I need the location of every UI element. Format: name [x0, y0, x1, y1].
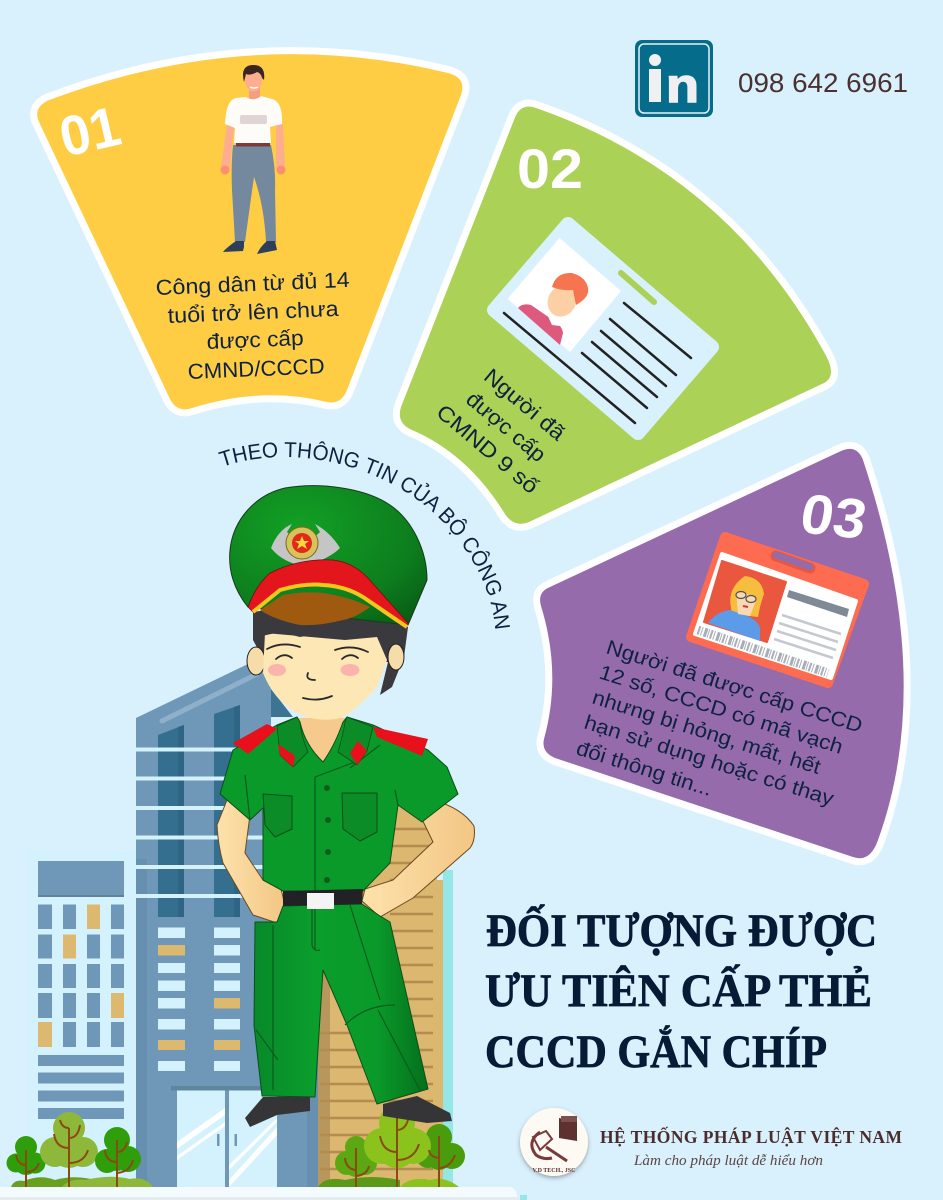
- ground strip: [0, 1187, 527, 1200]
- soldier: cap trim: [253, 585, 407, 627]
- soldier: hair back: [253, 600, 408, 695]
- text: 12-digit ID holders: đổi thông tin...: [574, 737, 715, 801]
- text: citizens from 14: được cấp: [206, 326, 304, 354]
- text: 12-digit ID holders: 12 số, CCCD có mã vạch: [597, 661, 846, 759]
- number 02: 02: [517, 137, 583, 200]
- soldier: trousers: [254, 904, 428, 1104]
- text: 9-digit ID holders: Người đã: [479, 364, 570, 445]
- panel 03: 12-digit ID holders: [540, 449, 904, 858]
- text: 12-digit ID holders: hạn sử dụng hoặc có thay: [582, 711, 837, 811]
- trees: left group: [6, 1112, 153, 1187]
- buildings: [28, 662, 453, 1187]
- soldier: ears: [247, 644, 404, 675]
- panel 02: 9-digit ID holders: [400, 106, 831, 524]
- phone number: 098 642 6961: [738, 68, 908, 98]
- soldier: cap brim: [260, 592, 370, 625]
- curved text: according to the Ministry of Public Security: THEO THÔNG TIN CỦA BỘ CÔNG AN: [218, 441, 510, 629]
- soldier: cap crown: [230, 486, 427, 625]
- icon: chip ID card: [691, 537, 864, 683]
- title: [485, 904, 877, 1078]
- text: 9-digit ID holders: CMND 9 số: [432, 400, 543, 499]
- text: 12-digit ID holders: [574, 636, 865, 811]
- text: citizens from 14: [155, 268, 350, 384]
- title: ĐỐI TƯỢNG ĐƯỢC: [486, 904, 877, 957]
- soldier: belt: [283, 889, 363, 909]
- soldier: pockets: [263, 793, 377, 841]
- number 01: 01: [54, 94, 126, 169]
- text: citizens from 14: CMND/CCCD: [187, 354, 325, 384]
- text: 9-digit ID holders: được cấp: [461, 387, 550, 467]
- text: 12-digit ID holders: nhưng bị hỏng, mất, hết: [590, 686, 824, 779]
- text: 9-digit ID holders: [432, 364, 570, 499]
- soldier: fringe: [258, 604, 402, 652]
- left building: [28, 851, 136, 1187]
- soldier: cap badge: [271, 524, 340, 566]
- brand slogan: Làm cho pháp luật dễ hiểu hơn: [633, 1153, 823, 1169]
- soldier: shirt: [220, 717, 458, 891]
- text: citizens from 14: tuổi trở lên chưa: [167, 297, 339, 328]
- soldier: cheeks: [268, 664, 360, 676]
- icon: LinkedIn logo: [635, 40, 713, 117]
- icon: ID card: [494, 224, 712, 433]
- soldier: arms: [217, 800, 474, 923]
- panel 01: citizens from 14: [37, 54, 462, 409]
- soldier: eyes, nose and mouth: [267, 644, 368, 700]
- soldier illustration: [217, 486, 474, 1127]
- trees: right group: [318, 1105, 465, 1187]
- soldier: buttons: [324, 785, 331, 883]
- logo: gavel seal: [520, 1108, 588, 1176]
- soldier: face: [263, 633, 387, 720]
- logo: gavel seal: V.D TECH., JSC: [533, 1168, 575, 1174]
- icon: LinkedIn logo: n: [666, 60, 699, 113]
- number 03: 03: [796, 482, 872, 551]
- soldier: epaulettes and collar tabs: [233, 724, 428, 767]
- soldier: collar: [277, 717, 373, 767]
- soldier: shoes: [245, 1096, 452, 1127]
- soldier: neck: [298, 718, 345, 764]
- brand name: HỆ THỐNG PHÁP LUẬT VIỆT NAM: [600, 1127, 902, 1147]
- title: CCCD GẮN CHÍP: [485, 1025, 827, 1078]
- soldier: cap band: [248, 560, 408, 627]
- text: 12-digit ID holders: Người đã được cấp CCCD: [604, 636, 865, 738]
- tan building: [318, 805, 453, 1187]
- icon: standing man: [220, 65, 286, 254]
- title: ƯU TIÊN CẤP THẺ: [485, 964, 872, 1017]
- main tower: [132, 662, 318, 1187]
- text: citizens from 14: Công dân từ đủ 14: [155, 268, 350, 300]
